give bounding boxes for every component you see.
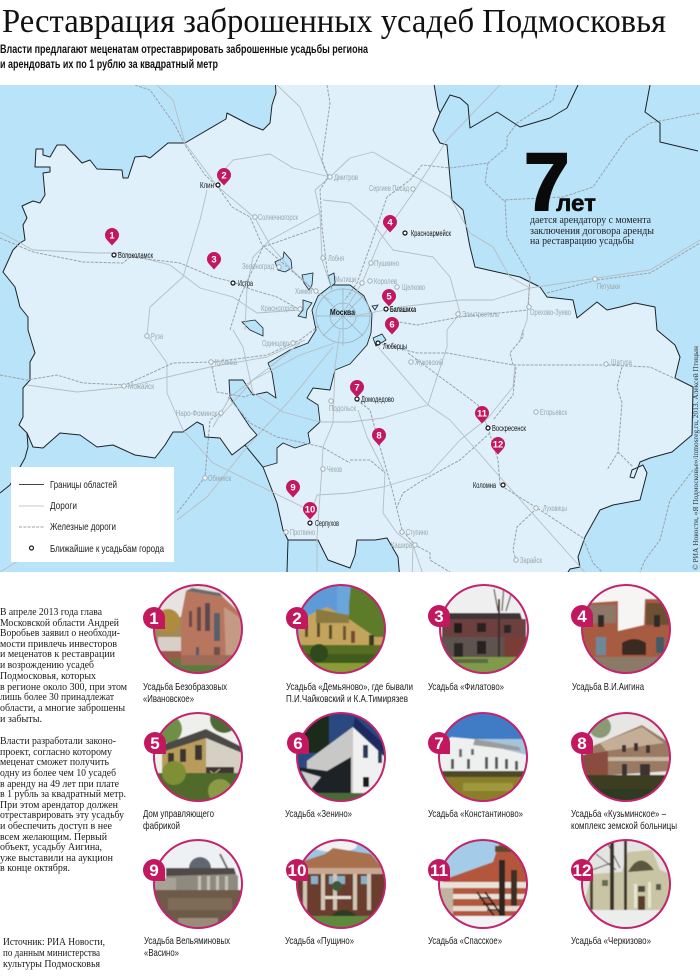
map: numbered pins: 11: [477, 408, 488, 419]
map: regional towns: Протвино: [290, 528, 315, 537]
map: Moscow ring and radials: [316, 288, 372, 346]
article text: В апреле 2013 года глава: [0, 607, 102, 618]
photo 4: [582, 585, 670, 673]
article text: и возрождению усадеб: [0, 660, 94, 671]
map: regional towns: Зеленоград: [242, 262, 274, 271]
map: regional towns: Одинцово: [262, 339, 289, 348]
badge 5: 5: [150, 734, 160, 753]
estate 9: [143, 840, 242, 959]
caption 11: Усадьба «Спасское»: [428, 935, 502, 947]
article text: и забыты.: [0, 714, 42, 725]
photo 9: [154, 840, 242, 928]
caption 5: Дом управляющего: [143, 808, 214, 820]
map: regional towns: Орехово-Зуево: [530, 308, 571, 317]
estate 6: [285, 713, 385, 820]
estate 12: [571, 840, 670, 947]
article text: мости привлечь инвесторов: [0, 639, 117, 650]
map: regional towns: Химки: [295, 287, 312, 296]
credit line: © РИА Новости, «Я Подмосковье»/inmosreg.ru, 2013. Алексей Птицын: [691, 346, 700, 570]
subtitle: [0, 42, 368, 71]
map: numbered pins: 12: [493, 439, 503, 450]
badge 12: 12: [573, 861, 591, 880]
callout: 7 years: лет: [556, 190, 596, 216]
map: small lakes: [242, 252, 386, 346]
map: towns nearest to estates: Воскресенск: [492, 424, 526, 433]
article text: Московской области Андрей: [0, 618, 119, 629]
article text: При этом арендатор должен: [0, 800, 118, 811]
map: towns nearest to estates: Домодедово: [361, 395, 394, 404]
caption 1: [143, 681, 228, 705]
map legend: [11, 467, 174, 562]
caption 10: Усадьба «Пущино»: [285, 935, 354, 947]
article text: уже выставили на аукцион: [0, 853, 113, 864]
map: regional towns: Ступино: [406, 528, 428, 537]
map: towns nearest to estates: Красноармейск: [411, 229, 451, 238]
map: regional towns: Красногорск: [261, 304, 295, 313]
map: numbered pins: 8: [376, 430, 382, 441]
article text: Подмосковья, которых: [0, 671, 97, 682]
map: regional towns: Егорьевск: [540, 408, 567, 417]
map: towns nearest to estates: Люберцы: [383, 342, 407, 351]
badge 10: 10: [288, 861, 306, 880]
map legend: Железные дороги: [50, 521, 116, 533]
estate 8: [571, 713, 677, 832]
estate 5: [143, 705, 242, 832]
photo 12: [582, 840, 670, 928]
caption 1: «Ивановское»: [143, 693, 194, 705]
caption 2: Усадьба «Демьяново», где бывали: [286, 681, 413, 693]
map: regional towns: Электросталь: [462, 310, 499, 319]
article text: одну из более чем 10 усадеб: [0, 768, 116, 779]
map: numbered pins: 1: [109, 230, 115, 241]
article text: всем желающим. Первый: [0, 832, 107, 843]
map: towns nearest to estates: [112, 181, 526, 528]
article text: в регионе около 300, при этом: [0, 682, 127, 693]
map: towns nearest to estates: Волоколамск: [118, 251, 153, 260]
photo 8: [582, 713, 670, 801]
badge 2: 2: [292, 609, 302, 628]
callout: 7 years: на реставрацию усадьбы: [530, 236, 634, 247]
source note: Источник: РИА Новости,: [3, 937, 105, 948]
article text: и обеспечить доступ в нее: [0, 821, 112, 832]
caption 8: [571, 808, 677, 832]
map: regional towns: Луховицы: [543, 504, 567, 513]
map: towns nearest to estates: Клин: [200, 181, 214, 190]
map: Moscow region territory: [3, 78, 693, 580]
caption 4: Усадьба В.И.Аигина: [572, 681, 644, 693]
badge 4: 4: [577, 607, 587, 626]
article text: проект, согласно которому: [0, 747, 113, 758]
subtitle: и арендовать их по 1 рублю за квадратный метр: [0, 57, 218, 71]
badge 3: 3: [434, 607, 444, 626]
caption 5: фабрикой: [143, 820, 180, 832]
callout: 7 years: 7: [524, 137, 570, 228]
callout: 7 years: [526, 152, 654, 246]
photo 10: [297, 840, 385, 928]
photo 5: [155, 714, 241, 800]
badge 6: 6: [293, 734, 303, 753]
article text: и меценатов к реставрации: [0, 649, 115, 660]
map: towns nearest to estates: Серпухов: [315, 519, 339, 528]
caption 9: «Васино»: [144, 947, 179, 959]
caption 5: [143, 808, 214, 832]
article text: лишь более 30 принадлежат: [0, 692, 114, 703]
article text: Воробьев заявил о необходи-: [0, 628, 120, 639]
estate 4: [571, 585, 670, 693]
badge 11: 11: [430, 861, 448, 880]
article text: в 1 рубль за квадратный метр.: [0, 789, 126, 800]
source note: по данным министерства: [3, 948, 100, 959]
map: towns nearest to estates: Балашиха: [390, 305, 416, 314]
map: roads: [0, 85, 700, 580]
map: towns nearest to estates: Москва: [330, 308, 355, 317]
article text: меценат сможет получить: [0, 757, 109, 768]
photo 3: [440, 585, 528, 673]
map: regional towns: Подольск: [329, 404, 356, 413]
map: numbered pins: 10: [305, 504, 315, 515]
map: numbered pins: 6: [389, 319, 395, 330]
map: numbered pins: 9: [290, 482, 296, 493]
map: regional towns: [122, 173, 632, 565]
article text: [0, 607, 127, 874]
source note: культуры Подмосковья: [3, 959, 100, 970]
map: regional towns: Мытищи: [335, 275, 356, 284]
map: regional towns: Чехов: [327, 465, 342, 474]
map: regional towns: Пушкино: [374, 259, 399, 268]
article text: в конце октября.: [0, 863, 70, 874]
map: regional towns: Наро-Фоминск: [176, 409, 217, 418]
map: regional towns: Королев: [374, 277, 397, 286]
caption 2: [286, 681, 413, 705]
map: numbered pins: 3: [211, 254, 217, 265]
title: Реставрация заброшенных усадеб Подмосковья: [2, 3, 666, 40]
caption 9: [144, 935, 231, 959]
badge 7: 7: [434, 734, 444, 753]
caption 7: Усадьба «Константиново»: [428, 808, 523, 820]
map: regional towns: Обнинск: [208, 474, 231, 483]
map: numbered pins: 4: [387, 217, 393, 228]
source note: [3, 937, 105, 970]
photo 6: [297, 713, 385, 801]
estate 3: [428, 585, 528, 693]
map legend: Границы областей: [50, 479, 117, 491]
caption 12: Усадьба «Черкизово»: [571, 935, 651, 947]
map: regional towns: Жуковский: [415, 358, 443, 367]
estate 1: [143, 585, 242, 705]
caption 9: Усадьба Вельяминовых: [144, 935, 231, 947]
badge 8: 8: [577, 734, 587, 753]
map: regional towns: Щелково: [402, 283, 425, 292]
caption 8: Усадьба «Кузьминское» –: [571, 808, 666, 820]
estate 7: [428, 713, 527, 820]
photo 2: [297, 585, 385, 673]
article text: области, а многие заброшены: [0, 703, 125, 714]
estate 10: [285, 840, 385, 947]
caption 2: П.И.Чайковский и К.А.Тимирязев: [286, 693, 408, 705]
caption 6: Усадьба «Зенино»: [285, 808, 352, 820]
article text: Власти разработали законо-: [0, 736, 116, 747]
article text: отреставрировать эту усадьбу: [0, 810, 125, 821]
map: regional towns: Солнечногорск: [258, 213, 298, 222]
caption 3: Усадьба «Филатово»: [428, 681, 504, 693]
map: towns nearest to estates: Коломна: [473, 481, 496, 490]
map legend: Дороги: [50, 500, 77, 512]
estate 2: [286, 585, 413, 705]
subtitle: Власти предлагают меценатам отреставрировать заброшенные усадьбы региона: [0, 42, 368, 56]
photo 1: [154, 585, 242, 673]
photo 11: [439, 840, 527, 928]
map: numbered pins: 5: [386, 291, 392, 302]
estate 11: [428, 840, 527, 947]
badge 9: 9: [149, 861, 159, 880]
map: towns nearest to estates: Истра: [238, 279, 253, 288]
map panel: [0, 78, 700, 580]
map: regional towns: Кубинка: [215, 358, 237, 367]
callout: 7 years: дается арендатору с момента: [530, 215, 651, 226]
callout: 7 years: заключения договора аренды: [530, 226, 654, 237]
map: regional towns: Можайск: [128, 382, 154, 391]
map: numbered pins: 7: [354, 382, 360, 393]
map: neighbouring region borders: [0, 85, 698, 572]
map: regional towns: Сергиев Посад: [369, 184, 409, 193]
map: railways: [0, 85, 700, 572]
badge 1: 1: [149, 609, 159, 628]
article text: в аренду на 49 лет при плате: [0, 779, 119, 790]
map: regional towns: Руза: [151, 332, 163, 341]
photo 7: [439, 713, 527, 801]
map: regional towns: Дмитров: [334, 173, 358, 182]
map: regional towns: Лобня: [328, 254, 344, 263]
map: regional towns: Кашира: [391, 541, 412, 550]
map: numbered pins: 2: [221, 170, 227, 181]
map legend: Ближайшие к усадьбам города: [50, 543, 164, 555]
caption 1: Усадьба Безобразовых: [143, 681, 228, 693]
map: regional towns: Шатура: [611, 358, 632, 367]
article text: объект, усадьбу Аигина,: [0, 842, 102, 853]
map: regional towns: Петушки: [597, 282, 620, 291]
map: regional towns: Зарайск: [520, 556, 542, 565]
map: Moscow city and New Moscow territory: [229, 285, 372, 467]
map: numbered pins: [105, 168, 505, 520]
